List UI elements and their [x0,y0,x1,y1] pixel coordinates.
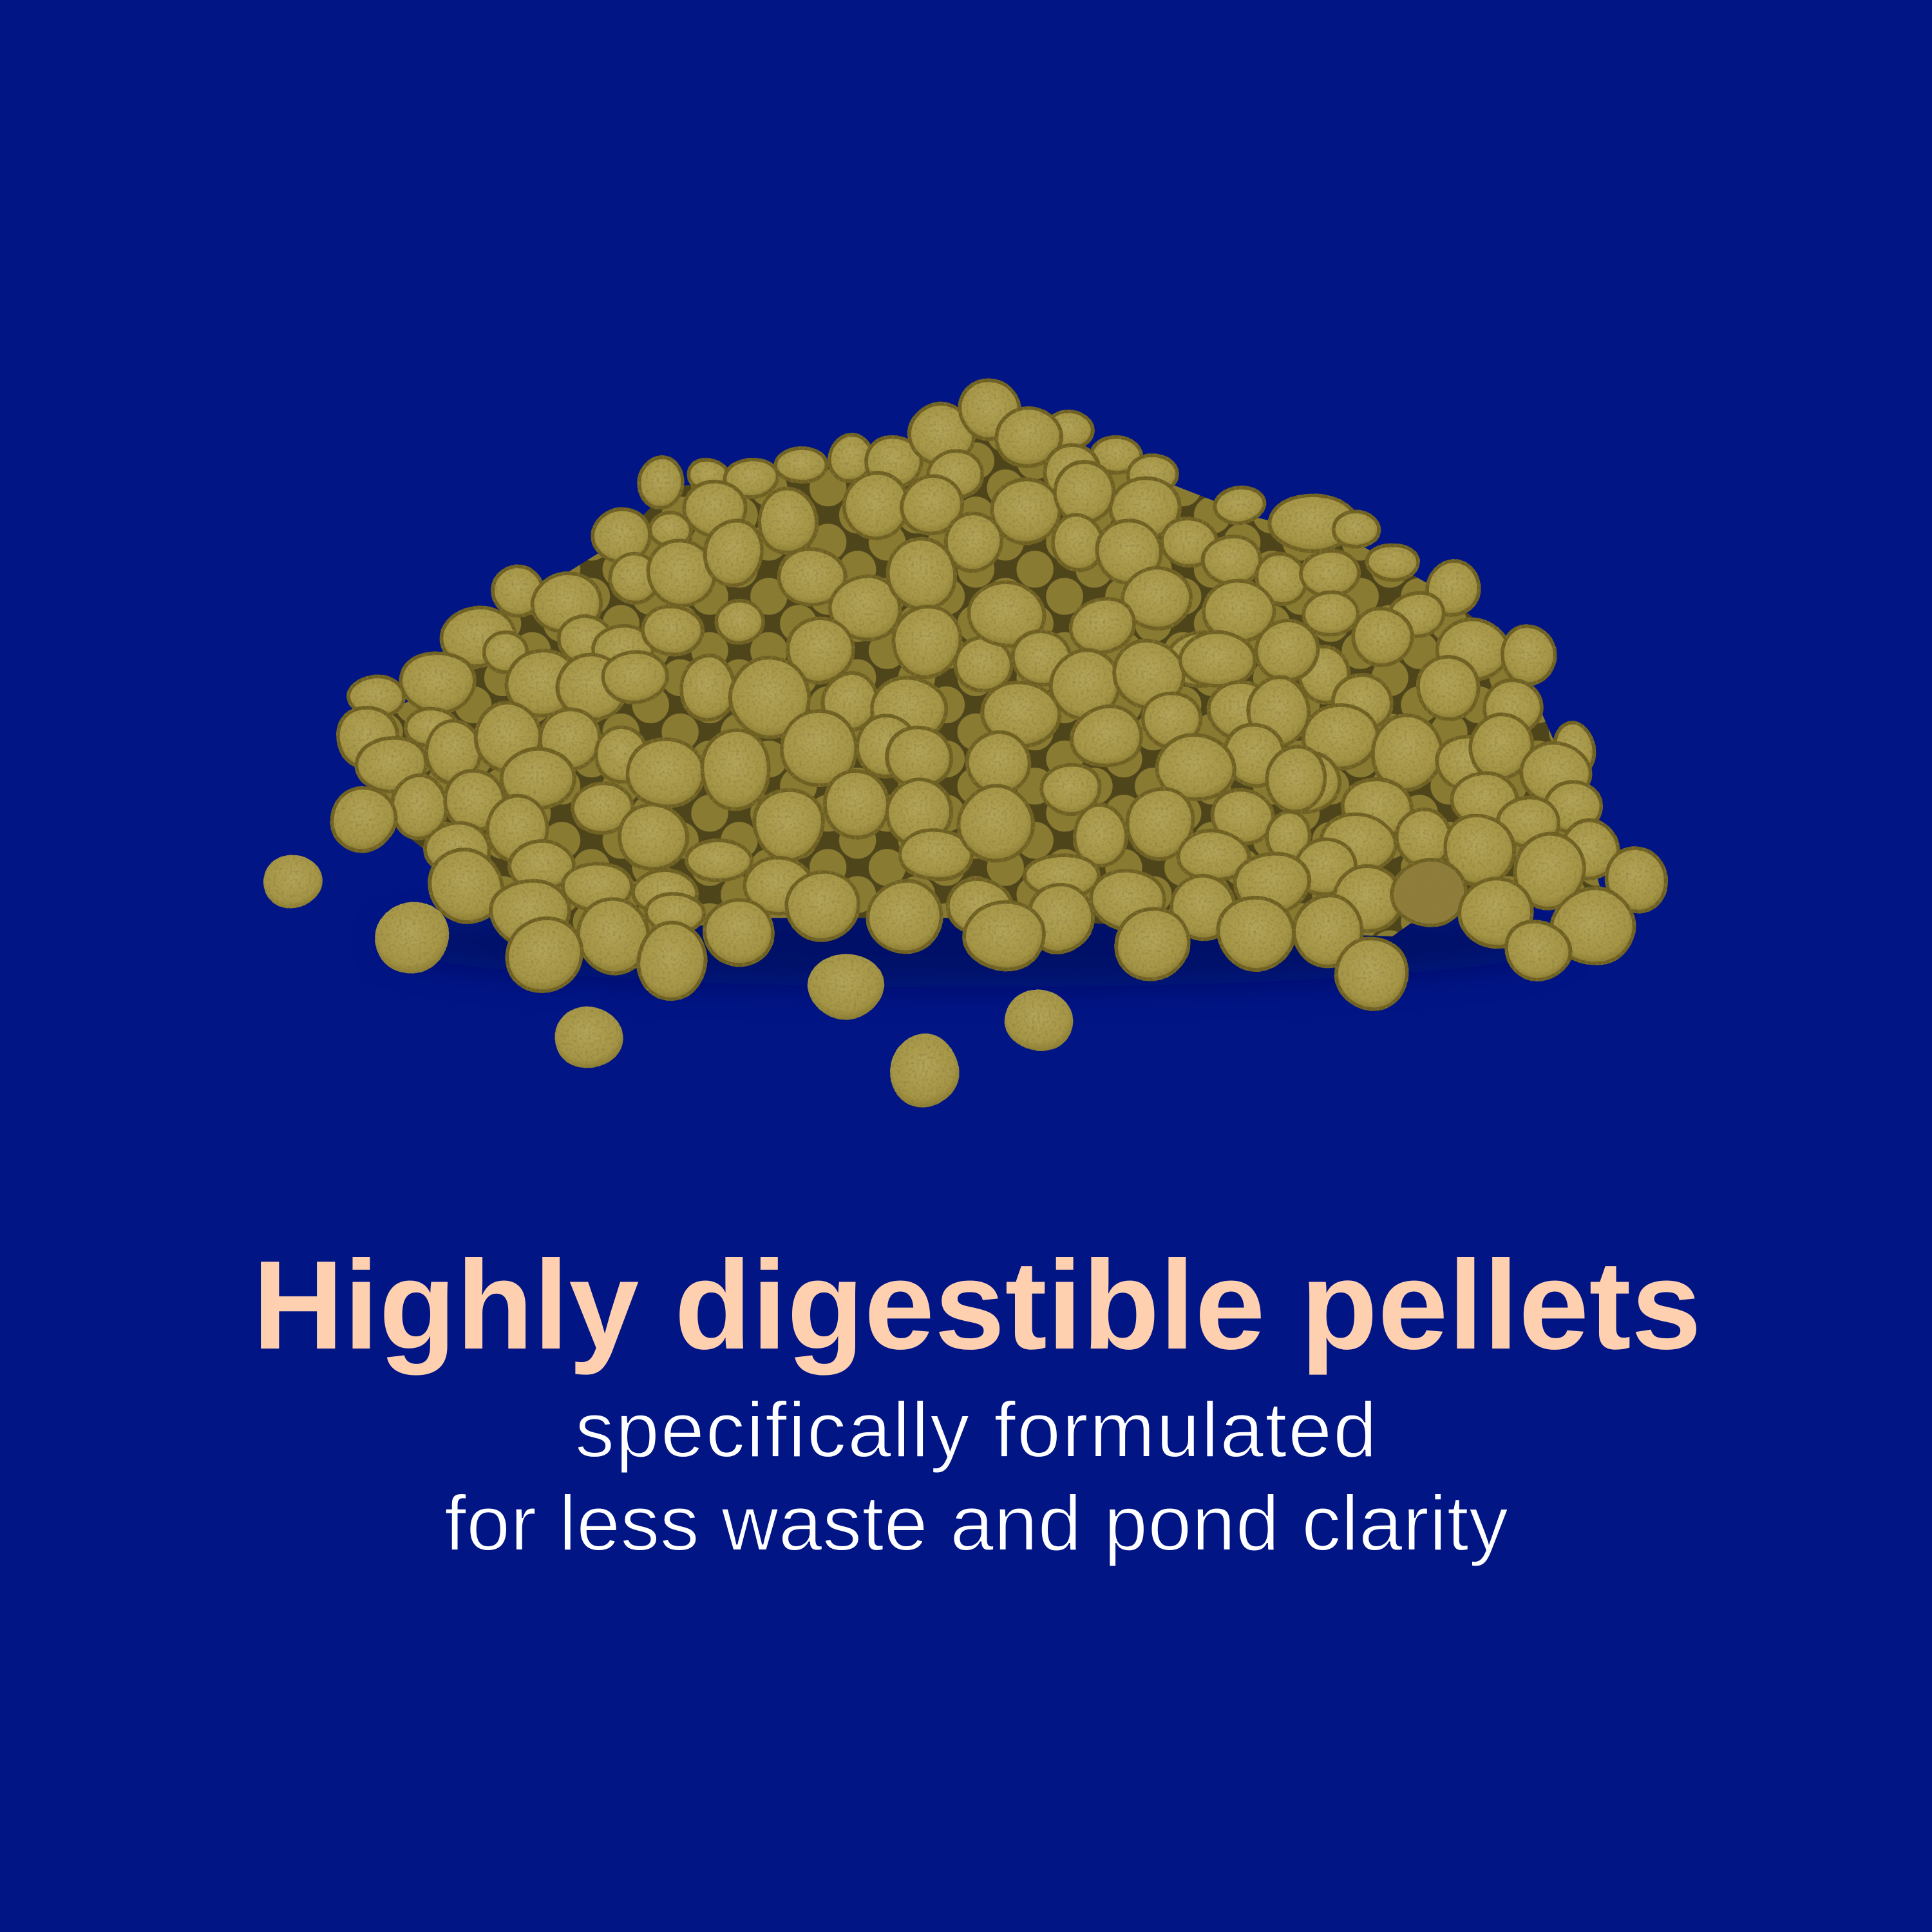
heading: Highly digestible pellets [252,1235,1701,1376]
subheading [444,1386,1508,1567]
pellet pile [332,379,1666,1008]
subheading: specifically formulated [575,1386,1377,1473]
stray pellets [263,857,1072,1106]
subheading: for less waste and pond clarity [444,1479,1508,1567]
